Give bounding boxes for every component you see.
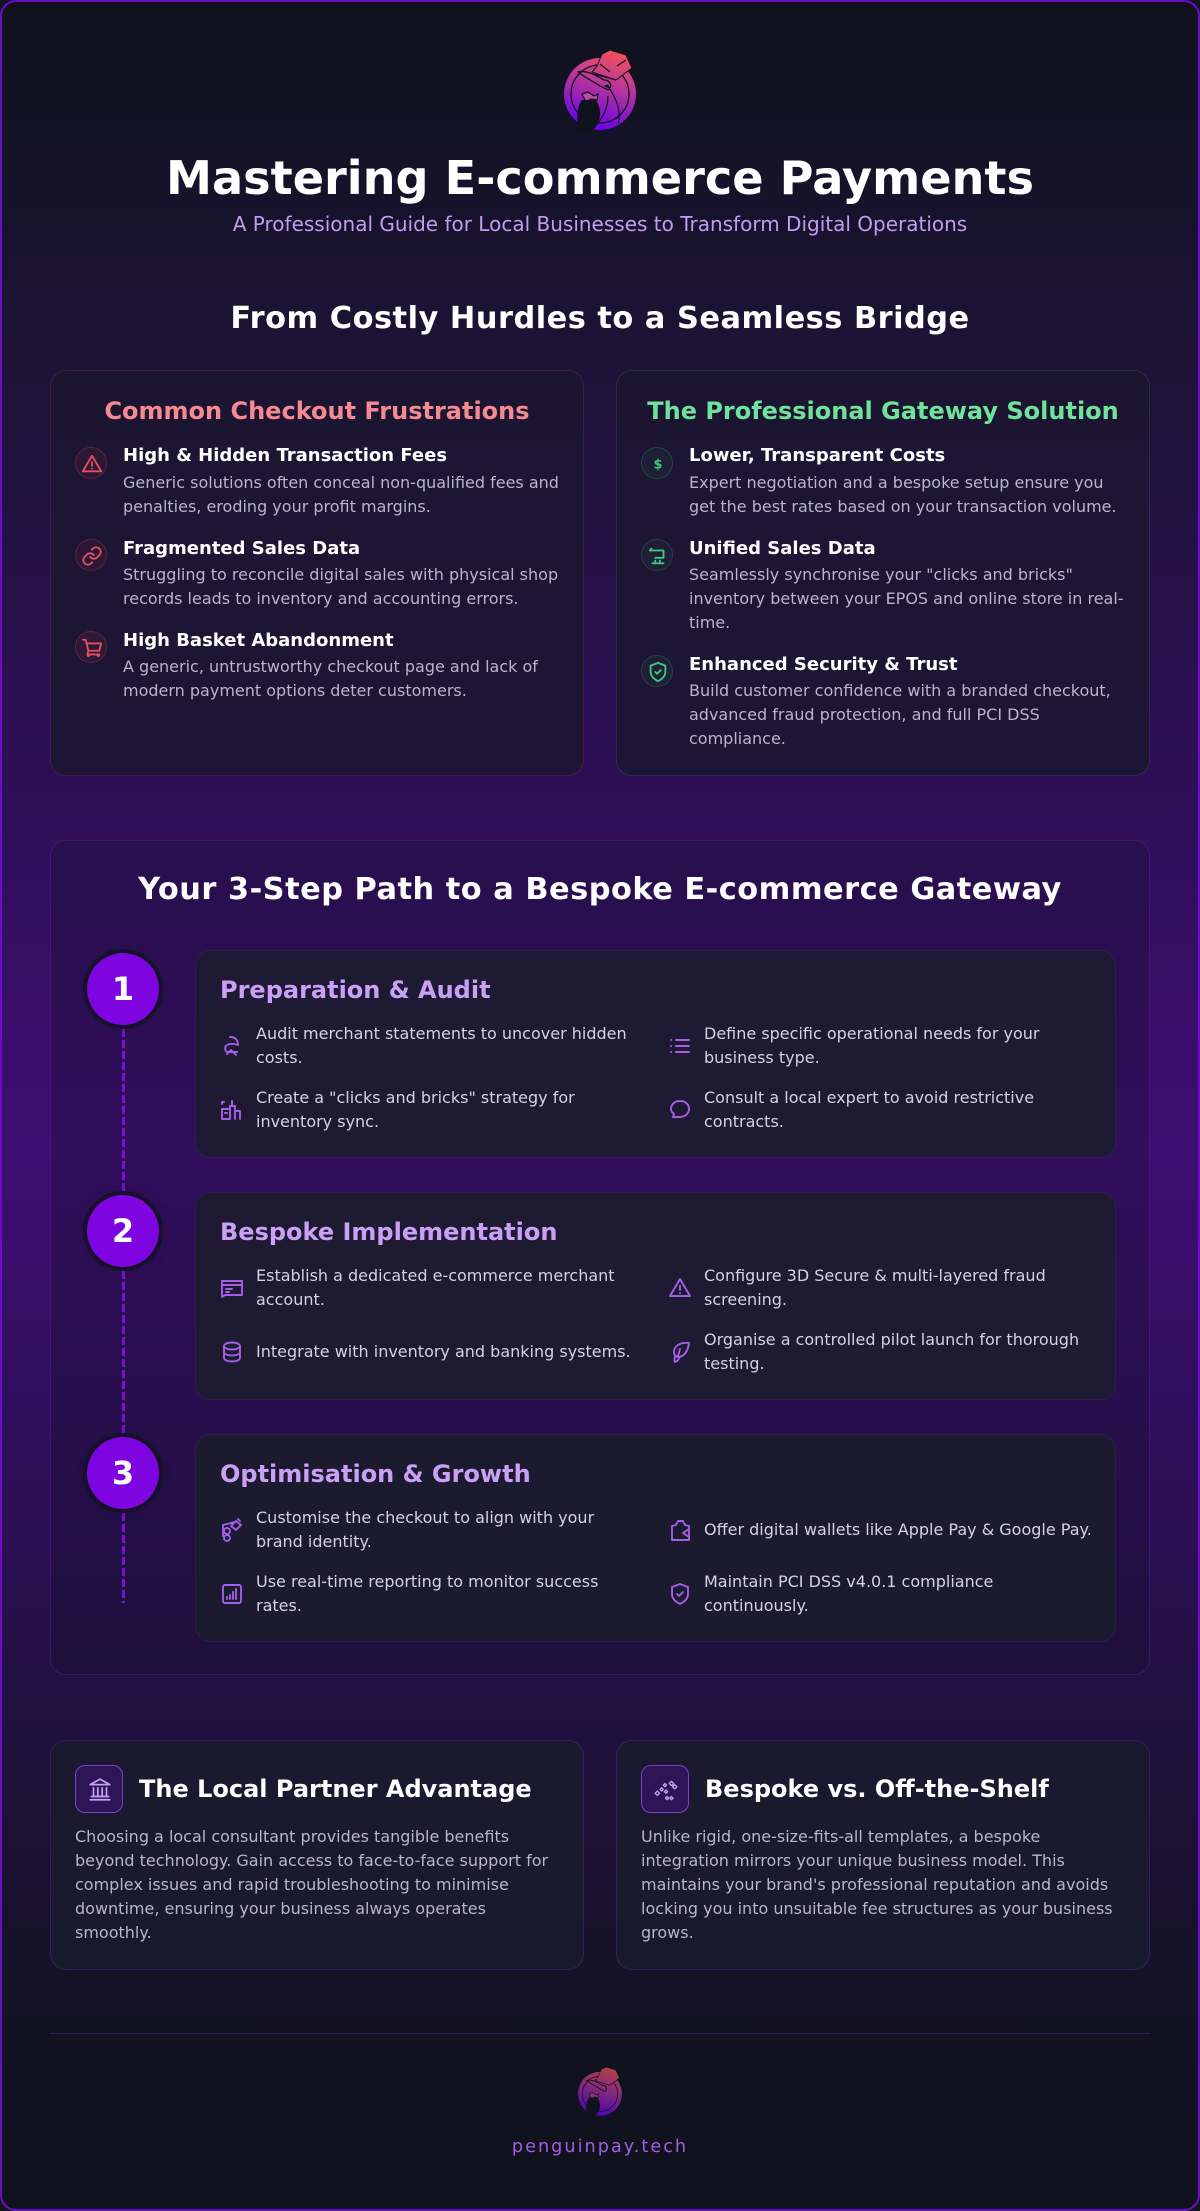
card heading: Bespoke vs. Off-the-Shelf <box>705 1775 1049 1803</box>
item text: fragmented data <box>123 565 558 608</box>
item text: business type. <box>704 1048 820 1067</box>
icon: scatter <box>641 1765 689 1813</box>
item text: brand identity. <box>256 1532 372 1551</box>
step card 2 <box>195 1192 1116 1400</box>
panel: common checkout frustrations <box>50 370 584 776</box>
footer logo <box>578 2067 622 2116</box>
item text <box>256 1508 594 1551</box>
item text <box>256 1572 598 1615</box>
card text <box>641 1827 1113 1942</box>
subtitle: A Professional Guide for Local Businesses to Transform Digital Operations <box>233 212 967 236</box>
item text: Define specific operational needs for your <box>704 1024 1039 1043</box>
panel heading: Common Checkout Frustrations <box>104 397 530 425</box>
step card 3 <box>195 1434 1116 1642</box>
icon: database <box>223 1342 241 1362</box>
item text <box>256 1088 575 1131</box>
icon: wallet <box>671 1520 690 1541</box>
item text <box>256 1024 627 1067</box>
step number 3: 3 <box>112 1454 134 1492</box>
item text: unified data <box>689 565 1124 632</box>
step heading: Preparation & Audit <box>220 976 491 1004</box>
section heading: bridge: From Costly Hurdles to a Seamless Bridge <box>230 301 970 336</box>
item text: Organise a controlled pilot launch for thorough <box>704 1330 1079 1349</box>
item: unified data: Unified Sales Data <box>689 538 876 559</box>
item text <box>704 1266 1046 1309</box>
item text: costs <box>689 473 1117 516</box>
item text: costs: get the best rates based on your transaction volume. <box>689 497 1117 516</box>
card text: complex issues and rapid troubleshooting to minimise <box>75 1875 509 1894</box>
item text: fragmented data: Struggling to reconcile digital sales with physical shop <box>123 565 558 584</box>
item text: Customise the checkout to align with your <box>256 1508 594 1527</box>
card text: smoothly. <box>75 1923 152 1942</box>
card text: beyond technology. Gain access to face-to-face support for <box>75 1851 548 1870</box>
step number 1 <box>87 953 159 1025</box>
item text: fees: Generic solutions often conceal non-qualified fees and <box>123 473 559 492</box>
item text: fragmented data: records leads to inventory and accounting errors. <box>123 589 518 608</box>
section heading: steps: Your 3-Step Path to a Bespoke E-commerce Gateway <box>138 872 1062 907</box>
item text: continuously. <box>704 1596 809 1615</box>
panel heading: The Professional Gateway Solution <box>647 397 1119 425</box>
icon: rocket <box>673 1342 690 1363</box>
item: fees: High & Hidden Transaction Fees <box>123 445 447 466</box>
item text: Offer digital wallets like Apple Pay & Google Pay. <box>704 1520 1092 1539</box>
item text: Create a "clicks and bricks" strategy for <box>256 1088 575 1107</box>
item text: Maintain PCI DSS v4.0.1 compliance <box>704 1572 993 1591</box>
item text: abandonment: A generic, untrustworthy checkout page and lack of <box>123 657 538 676</box>
item: security: Enhanced Security & Trust <box>689 654 958 675</box>
item text: unified data: inventory between your EPOS and online store in real- <box>689 589 1124 608</box>
card text: integration mirrors your unique business model. This <box>641 1851 1065 1870</box>
icon: broken link <box>75 539 107 571</box>
icon: dollar <box>641 447 673 479</box>
header logo: penguin in top hat <box>564 50 636 132</box>
item text: screening. <box>704 1290 787 1309</box>
item text: contracts. <box>704 1112 784 1131</box>
card text: locking you into unsuitable fee structures as your business <box>641 1899 1113 1918</box>
icon: shield <box>641 655 673 687</box>
item text: rates. <box>256 1596 302 1615</box>
item text: abandonment: modern payment options deter customers. <box>123 681 467 700</box>
item text: account. <box>256 1290 325 1309</box>
item text <box>256 1266 615 1309</box>
item: abandonment: High Basket Abandonment <box>123 630 394 651</box>
icon: bank <box>75 1765 123 1813</box>
item text: Integrate with inventory and banking systems. <box>256 1342 631 1361</box>
step heading: Bespoke Implementation <box>220 1218 557 1246</box>
panel: gateway solution <box>616 370 1150 776</box>
icon: hand coins <box>224 1036 239 1056</box>
icon: list <box>670 1039 690 1053</box>
step number 2: 2 <box>112 1212 134 1250</box>
item text: security: compliance. <box>689 729 786 748</box>
icon: sync <box>641 539 673 571</box>
card text <box>75 1827 548 1942</box>
icon: merchant card <box>221 1280 243 1298</box>
item text: security <box>689 681 1111 748</box>
panel: local partner <box>50 1740 584 1970</box>
item text: testing. <box>704 1354 765 1373</box>
timeline connector 3 <box>122 1513 125 1603</box>
panel: 3-step path <box>50 840 1150 1675</box>
item: costs: Lower, Transparent Costs <box>689 445 945 466</box>
icon: dollar: $ <box>654 458 663 473</box>
item text <box>704 1088 1034 1131</box>
item text: abandonment <box>123 657 538 700</box>
card text: maintains your brand's professional reputation and avoids <box>641 1875 1108 1894</box>
step heading: Optimisation & Growth <box>220 1460 531 1488</box>
card text: downtime, ensuring your business always operates <box>75 1899 486 1918</box>
item text: security: advanced fraud protection, and full PCI DSS <box>689 705 1040 724</box>
icon: shield check <box>671 1583 689 1605</box>
item text <box>704 1330 1079 1373</box>
item text <box>704 1572 993 1615</box>
panel: bespoke vs off-the-shelf <box>616 1740 1150 1970</box>
icon: warning triangle <box>75 447 107 479</box>
step number 1: 1 <box>112 970 134 1008</box>
footer website: penguinpay.tech <box>512 2137 688 2157</box>
step card 1 <box>195 950 1116 1158</box>
item text: Audit merchant statements to uncover hidden <box>256 1024 627 1043</box>
item text: fees: penalties, eroding your profit margins. <box>123 497 431 516</box>
step number 2 <box>87 1195 159 1267</box>
card text: grows. <box>641 1923 694 1942</box>
timeline connector 1 <box>122 1029 125 1194</box>
card heading: The Local Partner Advantage <box>139 1775 532 1803</box>
footer divider <box>50 2033 1150 2034</box>
icon: buildings <box>221 1100 241 1120</box>
item text: Configure 3D Secure & multi-layered fraud <box>704 1266 1046 1285</box>
icon: chart <box>222 1584 242 1604</box>
icon: chat <box>670 1100 690 1118</box>
item: fragmented data: Fragmented Sales Data <box>123 538 360 559</box>
timeline connector 2 <box>122 1271 125 1436</box>
title: Mastering E-commerce Payments <box>166 151 1034 205</box>
item text: inventory sync. <box>256 1112 379 1131</box>
item text: Consult a local expert to avoid restrictive <box>704 1088 1034 1107</box>
icon: palette tools <box>222 1518 242 1542</box>
item text: Use real-time reporting to monitor success <box>256 1572 598 1591</box>
item text: fees <box>123 473 559 516</box>
item text: costs. <box>256 1048 303 1067</box>
item text: Establish a dedicated e-commerce merchant <box>256 1266 615 1285</box>
step number 3 <box>87 1437 159 1509</box>
item text: unified data: time. <box>689 613 730 632</box>
item text: unified data: Seamlessly synchronise your "clicks and bricks" <box>689 565 1073 584</box>
item text: costs: Expert negotiation and a bespoke setup ensure you <box>689 473 1104 492</box>
card text: Choosing a local consultant provides tangible benefits <box>75 1827 509 1846</box>
icon: cart <box>75 631 107 663</box>
card text: Unlike rigid, one-size-fits-all templates, a bespoke <box>641 1827 1040 1846</box>
icon: warning <box>669 1278 691 1297</box>
item text <box>704 1024 1040 1067</box>
item text: security: Build customer confidence with a branded checkout, <box>689 681 1111 700</box>
